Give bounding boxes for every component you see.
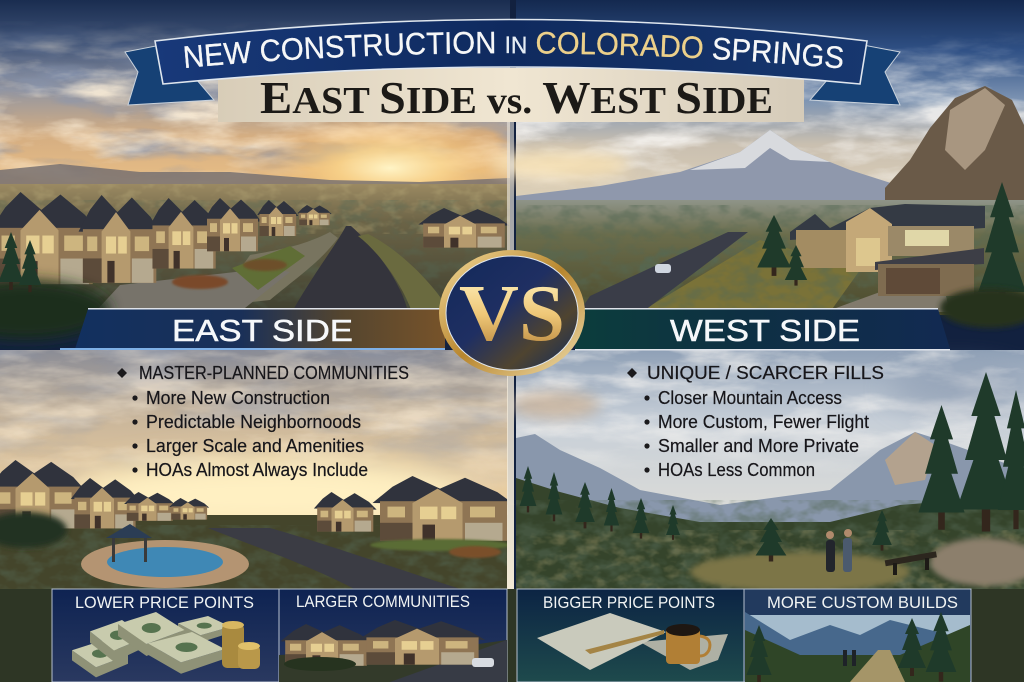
- west item 1: Closer Mountain Access: [658, 388, 842, 408]
- panel: bottom tile strip: [0, 589, 1024, 682]
- west side bullet list: [627, 363, 884, 480]
- pine trees west: [757, 182, 1024, 328]
- west land: [516, 200, 1024, 315]
- road east: [292, 226, 408, 312]
- icon: row of lit houses: [279, 620, 507, 682]
- west heading bullet: UNIQUE / SCARCER FILLS: [647, 363, 884, 383]
- highway: [578, 232, 748, 314]
- clouds: east sky: [0, 20, 510, 190]
- tile: larger communities: LARGER COMMUNITIES: [296, 593, 470, 611]
- clouds: west lower: [512, 350, 1024, 462]
- east item 1: More New Construction: [146, 388, 330, 408]
- east land: [0, 184, 510, 314]
- rocky peak: [885, 86, 1024, 200]
- panel: east side details background: [0, 350, 515, 592]
- shrubs east: [0, 512, 510, 558]
- road lower east: [208, 528, 470, 592]
- trees and shrubs east: [0, 232, 287, 340]
- mountains lower west: [516, 432, 1024, 560]
- houses east row: [0, 192, 510, 284]
- tile: more custom builds: MORE CUSTOM BUILDS: [767, 594, 958, 612]
- east side bullet list: [117, 363, 409, 480]
- title: NEW CONSTRUCTION IN COLORADO SPRINGS: [184, 32, 843, 68]
- east item 4: HOAs Almost Always Include: [146, 460, 368, 480]
- band: east side: [60, 308, 445, 350]
- blue title ribbon: [155, 20, 867, 84]
- tile: bigger price points: BIGGER PRICE POINTS: [543, 594, 715, 612]
- driveway: [825, 292, 950, 312]
- icon: cash stacks and coins: [72, 612, 260, 677]
- west item 2: More Custom, Fewer Flight: [658, 412, 869, 432]
- vs badge: [439, 250, 585, 376]
- icon: plans, pen and coffee mug: [537, 613, 728, 670]
- band: west side: [575, 308, 950, 350]
- sun glow: [240, 113, 540, 223]
- cream subtitle panel: [218, 68, 804, 122]
- tile: lower price points: LOWER PRICE POINTS: [75, 594, 254, 612]
- two people: [826, 529, 852, 572]
- mountains: [516, 130, 1024, 215]
- houses lower right: [314, 476, 515, 541]
- bench: [885, 551, 937, 575]
- header banner: [124, 18, 901, 123]
- distant hills: [0, 164, 510, 200]
- panel: west side details background: [510, 350, 1024, 592]
- clouds: east lower: [0, 350, 508, 531]
- sidewalks and lawns east: [95, 232, 450, 312]
- vs badge: VS: [459, 270, 565, 358]
- east item 2: Predictable Neighbornoods: [146, 412, 361, 432]
- tile: more custom builds: [744, 589, 971, 682]
- band: west side: WEST SIDE: [670, 313, 860, 348]
- ribbon tails: [125, 44, 900, 105]
- panel: east side upper landscape: [0, 0, 540, 340]
- houses lower left: [0, 460, 209, 528]
- tile: lower price points: [52, 589, 279, 682]
- clearing: [690, 552, 910, 592]
- tile: larger communities: [279, 589, 507, 682]
- clouds: west sky: [488, 39, 1024, 187]
- subtitle: EAST SIDE vs. WEST SIDE: [260, 72, 773, 123]
- east item 3: Larger Scale and Amenities: [146, 436, 364, 456]
- west item 4: HOAs Less Common: [658, 460, 815, 480]
- forest: [516, 478, 1024, 590]
- east heading bullet: MASTER-PLANNED COMMUNITIES: [139, 363, 409, 383]
- band: east side: EAST SIDE: [172, 313, 353, 348]
- ground east: [0, 515, 508, 590]
- pool and gazebo: [81, 524, 249, 588]
- tile: bigger price points: [517, 589, 744, 682]
- west item 3: Smaller and More Private: [658, 436, 859, 456]
- panel: west side upper landscape: [490, 0, 1024, 328]
- house west: [790, 204, 985, 296]
- tall pines: [520, 372, 1024, 562]
- center divider: [507, 122, 514, 592]
